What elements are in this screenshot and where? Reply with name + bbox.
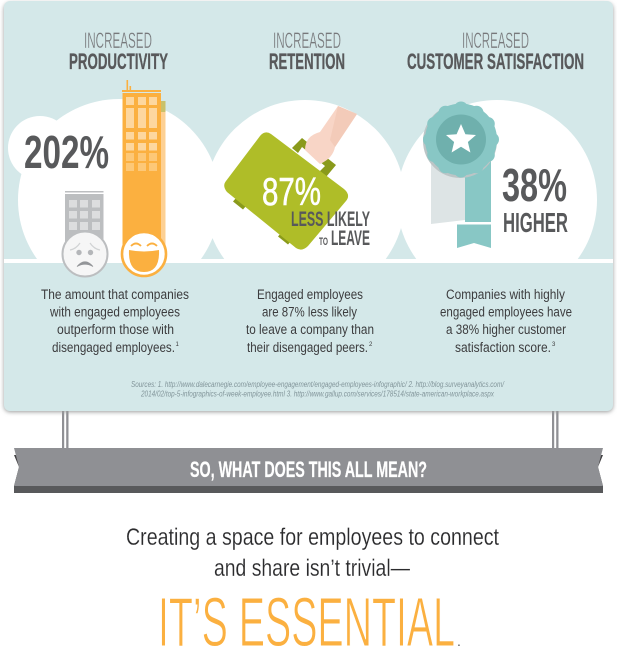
callout: it's essential: . [457,633,461,649]
briefcase handle [292,138,336,177]
text block: productivity: outperform those with [57,322,174,337]
icon: gray building [65,191,104,249]
closing statement: Creating a space for employees to connect [126,524,499,551]
stat: 38% higher: HIGHER [503,207,568,238]
label: less likely to leave: LESS LIKELY [291,208,370,231]
text block: productivity: disengaged employees. [52,340,175,355]
heading: increased customer satisfaction: INCREASED [462,28,529,53]
closing statement: and share isn’t trivial— [214,555,410,582]
icon: hand holding briefcase [224,106,357,250]
hand [305,106,357,164]
stat: 38% higher: 38% [502,159,567,211]
banner [14,448,603,493]
text block: satisfaction: satisfaction score. [455,340,551,355]
text block: retention: are 87% less likely [262,304,357,320]
text block: retention: to leave a company than [246,322,374,337]
text block: satisfaction: engaged employees have [440,304,572,320]
text block: productivity: 1 [176,342,180,348]
sources: 2014/02/top-5-infographics-of-week-employee.html 3. http://www.gallup.com/services/178514/state-american-workplace.aspx [140,390,495,398]
white circles backdrop [8,99,597,259]
sources [131,380,505,398]
sources: Sources: 1. http://www.dalecarnegie.com/employee-engagement/engaged-employees-infographic/ 2. http://blog.surveyanalytics.com/ [131,380,505,389]
poles [62,405,558,451]
icon: award ribbon [423,102,499,248]
panel: benefits [4,1,613,412]
heading: increased productivity: PRODUCTIVITY [69,49,168,74]
heading: increased productivity: INCREASED [84,28,152,53]
text block: satisfaction: a 38% higher customer [446,322,566,337]
closing statement [126,524,499,582]
stat: 38% higher [502,159,568,238]
divider band [4,259,613,263]
icon: sad face [62,232,108,276]
heading: increased retention [269,28,345,74]
text block: productivity: The amount that companies [41,287,189,302]
heading: increased productivity [69,28,168,74]
text block: retention: their disengaged peers. [247,340,368,355]
text block: retention [246,287,374,355]
icon: laughing face [122,232,166,276]
stat: 202%: 202% [24,126,109,178]
stat: 87%: 87% [262,171,321,214]
label: less likely to leave [291,208,370,250]
briefcase feet [233,198,291,244]
banner title: SO, WHAT DOES THIS ALL MEAN? [190,457,427,482]
text block: retention: 2 [369,342,373,348]
heading: increased retention: INCREASED [273,28,341,53]
text block: retention: Engaged employees [257,287,363,302]
text block: productivity [41,287,189,355]
heading: increased retention: RETENTION [269,49,345,74]
heading: increased customer satisfaction [407,28,584,74]
label: less likely to leave: TO [319,236,328,248]
text block: satisfaction: Companies with highly [446,287,565,302]
text block: satisfaction [440,287,572,355]
text block: satisfaction: 3 [552,342,556,348]
icon: orange building [122,80,166,253]
callout: it's essential [158,583,461,657]
briefcase body [224,132,348,250]
label: less likely to leave: LEAVE [331,227,370,250]
text block: productivity: with engaged employees [49,304,180,320]
